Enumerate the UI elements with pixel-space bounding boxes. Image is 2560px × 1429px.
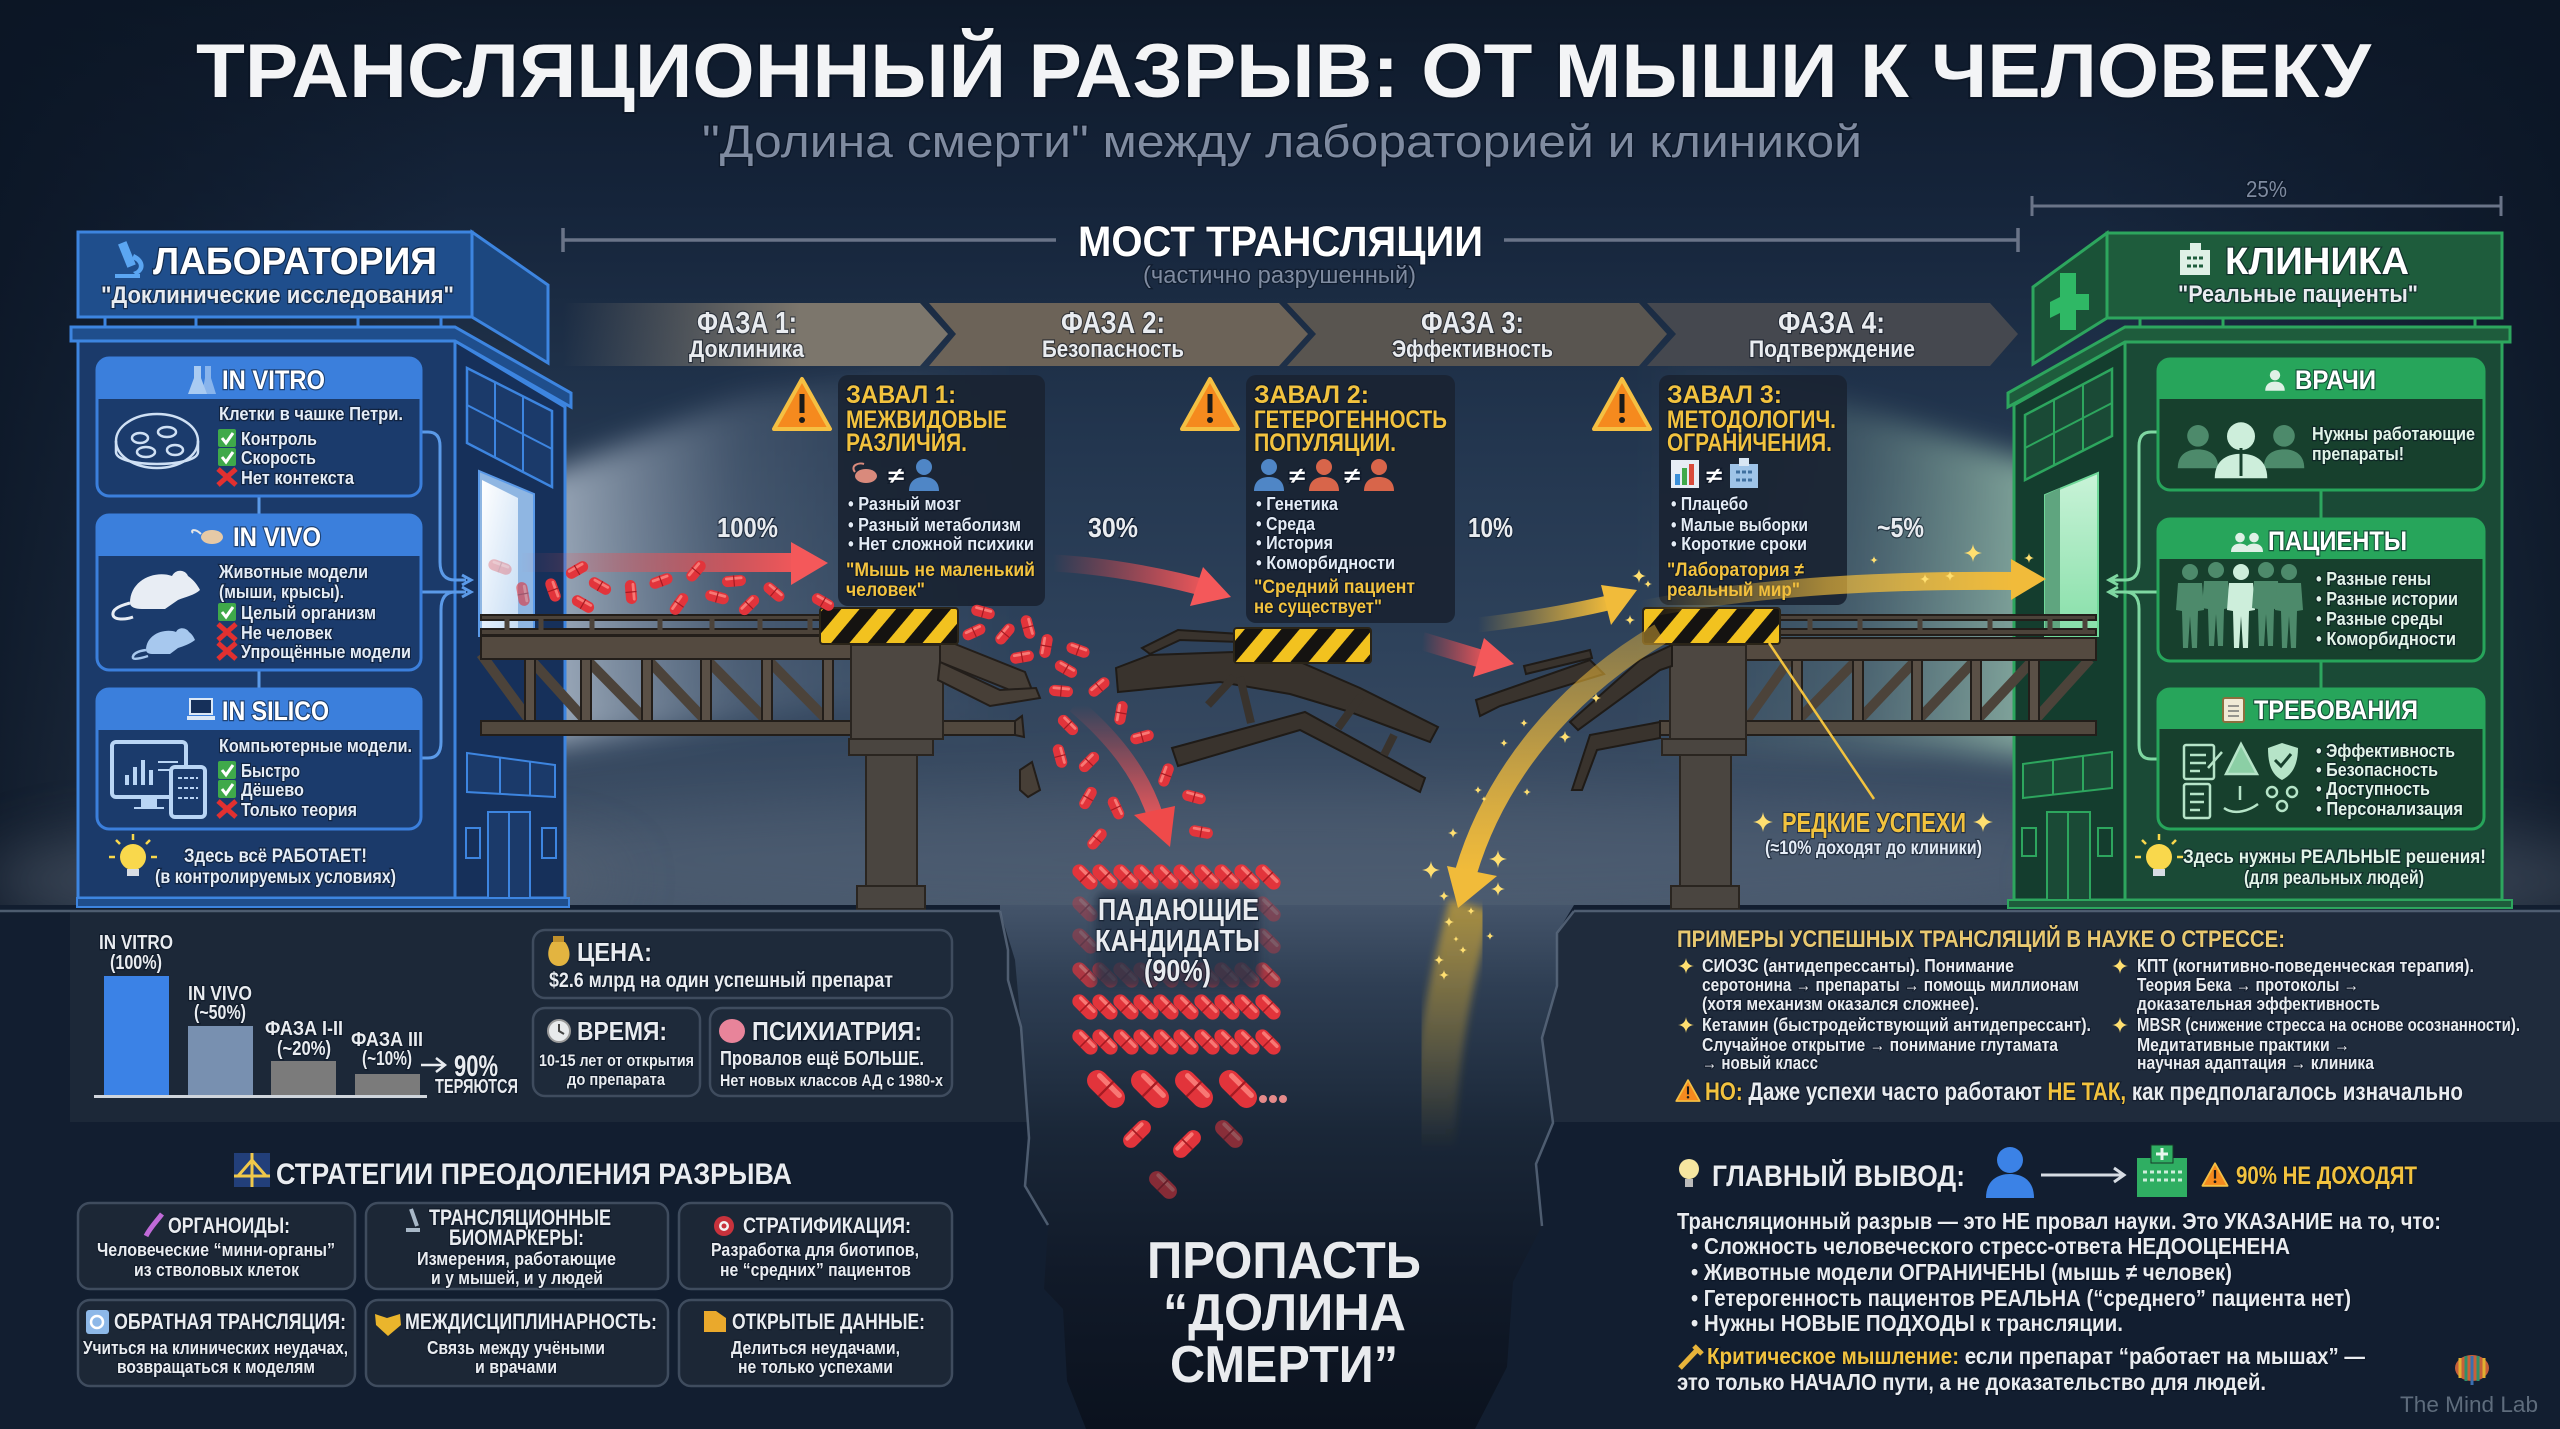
stat card: psychiatry xyxy=(710,1008,952,1096)
icons: patients not equal: ≠ xyxy=(1344,463,1360,488)
example: CBT: доказательная эффективность xyxy=(2137,994,2380,1014)
strategy: biomarkers: и у мышей, и у людей xyxy=(431,1268,603,1288)
bar chart: attrition: (~50%) xyxy=(194,1002,246,1024)
sparkles xyxy=(1422,544,2034,980)
icon: computer and tablet xyxy=(112,742,205,817)
bridge: collapsed central span xyxy=(1116,630,1604,792)
callout: blockage 1: МЕЖВИДОВЫЕ xyxy=(846,406,1007,434)
icon: refresh xyxy=(86,1310,109,1334)
icon: mouse not equal human xyxy=(853,459,939,491)
phase 4: Подтверждение xyxy=(1749,336,1915,363)
strategy: stratification: не “средних” пациентов xyxy=(720,1260,911,1280)
note: real solutions needed xyxy=(2135,834,2486,889)
callout: blockage 3: • Плацебо xyxy=(1671,494,1748,514)
strategy: open data: ОТКРЫТЫЕ ДАННЫЕ: xyxy=(732,1309,925,1334)
callout: blockage 3: МЕТОДОЛОГИЧ. xyxy=(1667,406,1836,434)
bar chart: attrition xyxy=(94,932,518,1098)
note: real solutions needed: (для реальных людей) xyxy=(2244,868,2424,889)
icon: hospital xyxy=(2180,243,2210,275)
strategy: organoids: ОРГАНОИДЫ: xyxy=(168,1213,290,1238)
conclusion body xyxy=(1677,1208,2441,1336)
callout: blockage 2: • Коморбидности xyxy=(1256,553,1395,573)
strategy: biomarkers: Измерения, работающие xyxy=(417,1249,616,1269)
card: patients: • Разные среды xyxy=(2316,609,2443,629)
title: ТРАНСЛЯЦИОННЫЙ РАЗРЫВ: ОТ МЫШИ К ЧЕЛОВЕКУ xyxy=(196,28,2372,114)
strategy: interdisciplinary: Связь между учёными xyxy=(427,1338,605,1358)
heading: bridge of translation: (частично разрушенный) xyxy=(1143,262,1416,289)
chasm label: “ДОЛИНА xyxy=(1163,1284,1406,1342)
callout: blockage 1: человек" xyxy=(846,580,925,601)
callout: blockage 3: "Лаборатория ≠ xyxy=(1667,560,1805,581)
card: in silico: Только теория xyxy=(241,800,357,820)
card: in vitro: Контроль xyxy=(241,429,317,449)
icon: money bag xyxy=(548,936,570,966)
bar chart: attrition: (100%) xyxy=(110,952,162,974)
callout: blockage 3: ОГРАНИЧЕНИЯ. xyxy=(1667,429,1832,457)
example: SSRI: серотонина → препараты → помощь миллионам xyxy=(1702,975,2079,995)
stat card: price xyxy=(533,930,952,998)
icon: green cross xyxy=(2050,273,2089,330)
stat card: time xyxy=(533,1008,700,1096)
candidate pills on bridge and falling xyxy=(487,558,1214,852)
light beam: laboratory door xyxy=(520,350,1010,750)
card: doctors: препараты! xyxy=(2312,444,2404,464)
phase 4 xyxy=(1647,303,2018,366)
conclusion body: • Нужны НОВЫЕ ПОДХОДЫ к трансляции. xyxy=(1691,1310,2123,1336)
falling candidates block: (90%) xyxy=(1144,953,1211,988)
icon: laptop xyxy=(187,699,215,720)
strategy: stratification: СТРАТИФИКАЦИЯ: xyxy=(743,1213,911,1238)
card connectors xyxy=(2109,432,2321,759)
bar chart: attrition: ФАЗА I-II xyxy=(265,1018,343,1040)
strategy: reverse translation: ОБРАТНАЯ ТРАНСЛЯЦИЯ: xyxy=(114,1309,346,1334)
callout: blockage 3: • Малые выборки xyxy=(1671,515,1808,535)
icon: blue mouse xyxy=(133,628,195,659)
panel: clinic building xyxy=(2008,233,2512,908)
strategy: stratification: Разработка для биотипов, xyxy=(711,1240,919,1260)
icon: patients group xyxy=(2176,562,2303,648)
note: real solutions needed: Здесь нужны РЕАЛЬНЫЕ решения! xyxy=(2183,847,2486,868)
falling candidates block: КАНДИДАТЫ xyxy=(1095,923,1260,958)
heading: bridge of translation xyxy=(563,218,2018,289)
card: in vivo: Животные модели xyxy=(218,562,368,582)
arrow: red falling xyxy=(1075,705,1175,847)
callout: blockage 2 xyxy=(1182,375,1455,623)
callout: blockage 1: РАЗЛИЧИЯ. xyxy=(846,429,967,457)
cliff edges xyxy=(0,911,2560,1226)
heading: strategies: СТРАТЕГИИ ПРЕОДОЛЕНИЯ РАЗРЫВА xyxy=(276,1158,792,1191)
callout: blockage 2: ЗАВАЛ 2: xyxy=(1254,381,1369,409)
percent labels: 10% xyxy=(1468,512,1513,543)
callout: blockage 2: • История xyxy=(1256,533,1333,553)
sign: laboratory: ЛАБОРАТОРИЯ xyxy=(153,241,437,283)
chasm label: ПРОПАСТЬ xyxy=(1147,1232,1421,1290)
card: patients: ПАЦИЕНТЫ xyxy=(2268,526,2407,556)
card: in vivo: Целый организм xyxy=(241,603,376,623)
icon: dna xyxy=(146,1214,162,1236)
strategy: open data: не только успехами xyxy=(738,1357,893,1377)
icons: chart not equal hospital xyxy=(1671,458,1758,488)
card: in silico: Дёшево xyxy=(241,780,304,800)
strategy: reverse translation: Учиться на клинических неудачах, xyxy=(83,1338,348,1358)
callout: blockage 1 xyxy=(774,375,1045,606)
stat card: psychiatry: ПСИХИАТРИЯ: xyxy=(752,1016,922,1046)
note: works here xyxy=(109,834,396,888)
card connectors xyxy=(259,432,471,758)
example: MBSR xyxy=(2112,1015,2520,1073)
hazard barriers xyxy=(820,608,1780,663)
chasm label: СМЕРТИ” xyxy=(1170,1336,1398,1394)
icon: flasks xyxy=(188,366,216,394)
icon: hospital xyxy=(2137,1145,2187,1197)
falling candidates block xyxy=(1069,861,1284,1058)
strategy: interdisciplinary xyxy=(366,1300,668,1386)
phase 3: Эффективность xyxy=(1392,336,1553,363)
card: doctors xyxy=(2158,359,2484,490)
example: CBT: Теория Бека → протоколы → xyxy=(2137,975,2359,995)
card: requirements: ТРЕБОВАНИЯ xyxy=(2254,695,2418,725)
logo: The Mind Lab xyxy=(2400,1355,2538,1417)
callout: blockage 2: "Средний пациент xyxy=(1254,577,1415,598)
bar chart: attrition: (~10%) xyxy=(362,1048,412,1070)
dimension: 25%: 25% xyxy=(2246,176,2287,202)
card: in vivo: Упрощённые модели xyxy=(241,642,411,662)
icon: white mouse xyxy=(113,571,200,619)
bridge: left section xyxy=(481,615,1040,909)
arrow: red 100% xyxy=(520,542,828,585)
scattered large pills xyxy=(1083,1066,1287,1202)
strategy: reverse translation xyxy=(78,1300,355,1386)
strategy: open data xyxy=(679,1300,952,1386)
strategy: organoids: Человеческие “мини-органы” xyxy=(97,1240,335,1260)
sign: laboratory: "Доклинические исследования" xyxy=(101,282,454,309)
conclusion body: • Гетерогенность пациентов РЕАЛЬНА (“среднего” пациента нет) xyxy=(1691,1285,2351,1311)
panel: main conclusion xyxy=(1677,1145,2441,1395)
example: ketamine: Случайное открытие → понимание глутамата xyxy=(1702,1035,2059,1055)
strategy: biomarkers xyxy=(366,1203,668,1289)
strategy: biomarkers: БИОМАРКЕРЫ: xyxy=(449,1225,584,1250)
percent labels xyxy=(717,512,1924,543)
panel: laboratory building xyxy=(71,232,571,907)
phase 4: ФАЗА 4: xyxy=(1778,305,1885,340)
example: SSRI: (хотя механизм оказался сложнее). xyxy=(1702,994,1979,1014)
card: in silico xyxy=(97,689,421,829)
phase 3 xyxy=(1287,303,1667,366)
icon: mouse not equal human: ≠ xyxy=(888,463,904,488)
arrow: gold arc down into chasm xyxy=(1433,634,1660,1150)
card: in silico: IN SILICO xyxy=(222,696,329,726)
panel: successful translations xyxy=(1676,925,2520,1106)
strategy: reverse translation: возвращаться к моделям xyxy=(117,1357,315,1377)
icons: patients not equal xyxy=(1254,459,1394,491)
note: works here: Здесь всё РАБОТАЕТ! xyxy=(184,846,367,867)
callout: blockage 2: ПОПУЛЯЦИИ. xyxy=(1254,429,1396,457)
example: MBSR: научная адаптация → клиника xyxy=(2137,1053,2375,1073)
callout: blockage 1: • Нет сложной психики xyxy=(848,534,1034,554)
arrow xyxy=(2041,1168,2124,1182)
icon: doctor small xyxy=(2265,370,2285,391)
annotation: 90% lost xyxy=(421,1050,518,1098)
phase 1: ФАЗА 1: xyxy=(697,305,797,340)
stat card: time: ВРЕМЯ: xyxy=(577,1016,667,1046)
icon: doctors group xyxy=(2178,422,2304,478)
icon: doctor xyxy=(1986,1147,2034,1198)
panel: successful translations: ПРИМЕРЫ УСПЕШНЫХ ТРАНСЛЯЦИЙ В НАУКЕ О СТРЕССЕ: xyxy=(1677,925,2285,953)
example: MBSR: Медитативные практики → xyxy=(2137,1035,2350,1055)
callout: blockage 3 xyxy=(1594,375,1847,605)
icon: clock xyxy=(548,1020,570,1042)
building structure xyxy=(71,317,571,907)
example: SSRI xyxy=(1678,956,2079,1014)
icon: clipboard xyxy=(2223,698,2244,722)
callout: blockage 2: не существует" xyxy=(1254,597,1382,618)
annotation: 90% lost: ТЕРЯЮТСЯ xyxy=(435,1076,518,1098)
bridge: right section xyxy=(1570,615,2096,909)
example: ketamine: → новый класс xyxy=(1702,1053,1818,1073)
percent labels: ~5% xyxy=(1877,512,1924,543)
critical thinking note xyxy=(1677,1343,2365,1395)
stat card: psychiatry: Провалов ещё БОЛЬШЕ. xyxy=(720,1048,924,1070)
percent labels: 30% xyxy=(1088,512,1138,543)
arrow: gold to clinic xyxy=(1640,559,2046,610)
warning note: НО: Даже успехи часто работают НЕ ТАК, как предполагалось изначально xyxy=(1705,1078,2463,1106)
label: rare successes: (≈10% доходят до клиники) xyxy=(1765,838,1982,859)
card: patients: • Коморбидности xyxy=(2316,629,2456,649)
panel: examples right background xyxy=(1542,911,2560,1122)
bar chart: attrition: IN VIVO xyxy=(188,983,252,1005)
phase 2: Безопасность xyxy=(1042,336,1184,363)
arrow: gold up to phase 3 xyxy=(1478,585,1637,625)
icon: microscope xyxy=(115,241,144,278)
card: in vitro: Скорость xyxy=(241,448,316,468)
phase 1: Доклиника xyxy=(689,336,805,363)
strategy: organoids xyxy=(78,1203,355,1289)
icon: target xyxy=(714,1216,734,1236)
icons: patients not equal: ≠ xyxy=(1289,463,1305,488)
callout: blockage 3: ЗАВАЛ 3: xyxy=(1667,381,1782,409)
card: patients xyxy=(2158,519,2484,661)
icon: microscope xyxy=(406,1209,420,1230)
callout: blockage 1: "Мышь не маленький xyxy=(846,560,1035,581)
conclusion body: Трансляционный разрыв — это НЕ провал науки. Это УКАЗАНИЕ на то, что: xyxy=(1677,1208,2441,1234)
phase 2 xyxy=(929,303,1308,366)
callout: blockage 2: ГЕТЕРОГЕННОСТЬ xyxy=(1254,406,1447,434)
conclusion body: • Сложность человеческого стресс-ответа НЕДООЦЕНЕНА xyxy=(1691,1233,2290,1259)
example: CBT xyxy=(2112,956,2474,1014)
label: rare successes xyxy=(1753,807,1993,859)
stat card: time: 10-15 лет от открытия xyxy=(539,1051,694,1070)
callout: blockage 1: ЗАВАЛ 1: xyxy=(846,381,956,409)
card: in vitro xyxy=(97,358,421,496)
icon: brain xyxy=(719,1019,745,1043)
chasm xyxy=(0,905,2560,1429)
example: SSRI: СИОЗС (антидепрессанты). Понимание xyxy=(1702,956,2014,976)
phase chevrons xyxy=(563,303,2018,366)
heading: bridge of translation: МОСТ ТРАНСЛЯЦИИ xyxy=(1078,218,1483,266)
note: works here: (в контролируемых условиях) xyxy=(155,867,396,888)
panel: stats left background xyxy=(70,911,1029,1122)
card: requirements: • Безопасность xyxy=(2316,760,2438,780)
strategy: open data: Делиться неудачами, xyxy=(731,1338,900,1358)
stat card: time: до препарата xyxy=(567,1070,665,1089)
icon: people small xyxy=(2231,533,2263,552)
icon: petri dish xyxy=(116,414,198,468)
sign: laboratory xyxy=(78,232,548,363)
dimension: 25% xyxy=(2032,176,2501,216)
card: in vitro: Нет контекста xyxy=(241,468,355,488)
pillar 1 xyxy=(849,645,943,909)
rare success leader line xyxy=(1769,643,1874,799)
callout: blockage 2: • Генетика xyxy=(1256,494,1339,514)
callout: blockage 3: • Короткие сроки xyxy=(1671,534,1807,554)
phase 1 xyxy=(563,303,948,366)
icon: handshake xyxy=(375,1314,401,1336)
sign: clinic: КЛИНИКА xyxy=(2225,241,2409,283)
example: ketamine: Кетамин (быстродействующий антидепрессант). xyxy=(1702,1015,2091,1035)
stat card: price: $2.6 млрд на один успешный препарат xyxy=(549,969,893,992)
icon: folder xyxy=(704,1311,726,1332)
strategy: biomarkers: ТРАНСЛЯЦИОННЫЕ xyxy=(429,1205,611,1230)
card: doctors: ВРАЧИ xyxy=(2295,365,2376,395)
card: in vivo: (мыши, крысы). xyxy=(219,582,344,602)
conclusion body: • Животные модели ОГРАНИЧЕНЫ (мышь ≠ человек) xyxy=(1691,1259,2232,1285)
icon: mouse small xyxy=(192,530,223,544)
card: requirements: • Доступность xyxy=(2316,779,2430,799)
conclusion heading: ГЛАВНЫЙ ВЫВОД: xyxy=(1712,1159,1965,1193)
card: in vivo: IN VIVO xyxy=(233,522,321,552)
icon: bridge xyxy=(234,1153,270,1187)
stat card: psychiatry: Нет новых классов АД с 1980-х xyxy=(720,1071,943,1090)
strategy: stratification xyxy=(679,1203,952,1289)
light beam: clinic door xyxy=(1640,350,2060,760)
arrow: red 30% xyxy=(1053,563,1231,606)
callout: blockage 1: • Разный метаболизм xyxy=(848,515,1021,535)
phase 2: ФАЗА 2: xyxy=(1061,305,1165,340)
card: doctors: Нужны работающие xyxy=(2312,424,2475,444)
pillar 2 xyxy=(1662,645,1746,909)
logo: The Mind Lab: The Mind Lab xyxy=(2400,1392,2538,1417)
broken end xyxy=(1570,645,1672,790)
conclusion heading xyxy=(1679,1145,2417,1198)
icons: chart not equal hospital: ≠ xyxy=(1706,463,1722,488)
percent labels: 100% xyxy=(717,512,778,543)
subtitle: "Долина смерти" между лабораторией и клиникой xyxy=(702,116,1862,167)
critical thinking note: Критическое мышление: если препарат “работает на мышах” — xyxy=(1707,1343,2365,1369)
card: in vitro: IN VITRO xyxy=(222,365,325,395)
broken end xyxy=(938,638,1040,797)
callout: blockage 1: • Разный мозг xyxy=(848,494,961,514)
card: requirements xyxy=(2158,689,2484,829)
example: ketamine xyxy=(1678,1015,2091,1073)
building structure xyxy=(2008,318,2512,908)
bar chart: attrition: (~20%) xyxy=(277,1038,331,1060)
sign: clinic xyxy=(2033,233,2502,364)
card: requirements: • Персонализация xyxy=(2316,799,2463,819)
card: patients: • Разные гены xyxy=(2316,569,2431,589)
strategy: interdisciplinary: и врачами xyxy=(475,1357,557,1377)
stat card: price: ЦЕНА: xyxy=(577,937,652,967)
card: in silico: Компьютерные модели. xyxy=(219,736,412,756)
card: requirements: • Эффективность xyxy=(2316,741,2455,761)
card: patients: • Разные истории xyxy=(2316,589,2458,609)
annotation: 90% lost: 90% xyxy=(454,1050,498,1083)
card: in silico: Быстро xyxy=(241,761,300,781)
card: in vitro: Клетки в чашке Петри. xyxy=(219,404,403,424)
example: CBT: КПТ (когнитивно-поведенческая терапия). xyxy=(2137,956,2474,976)
card: in vivo xyxy=(97,515,421,670)
phase 3: ФАЗА 3: xyxy=(1421,305,1524,340)
strategy: organoids: из стволовых клеток xyxy=(134,1260,300,1280)
card: in vivo: Не человек xyxy=(241,623,333,643)
arrow: red 10% xyxy=(1422,638,1514,677)
callout: blockage 3: реальный мир" xyxy=(1667,580,1800,601)
bar chart: attrition: IN VITRO xyxy=(99,932,173,954)
label: rare successes: РЕДКИЕ УСПЕХИ xyxy=(1782,807,1966,838)
callout: blockage 2: • Среда xyxy=(1256,514,1316,534)
bar chart: attrition: ФАЗА III xyxy=(351,1029,423,1051)
chasm label xyxy=(1147,1232,1421,1394)
strategy: interdisciplinary: МЕЖДИСЦИПЛИНАРНОСТЬ: xyxy=(405,1309,657,1334)
falling candidates block: ПАДАЮЩИЕ xyxy=(1098,892,1259,927)
sign: clinic: "Реальные пациенты" xyxy=(2178,281,2418,308)
critical thinking note: это только НАЧАЛО пути, а не доказательство для людей. xyxy=(1677,1369,2266,1395)
conclusion heading: 90% НЕ ДОХОДЯТ xyxy=(2236,1162,2417,1190)
icons: requirement symbols xyxy=(2184,743,2298,818)
